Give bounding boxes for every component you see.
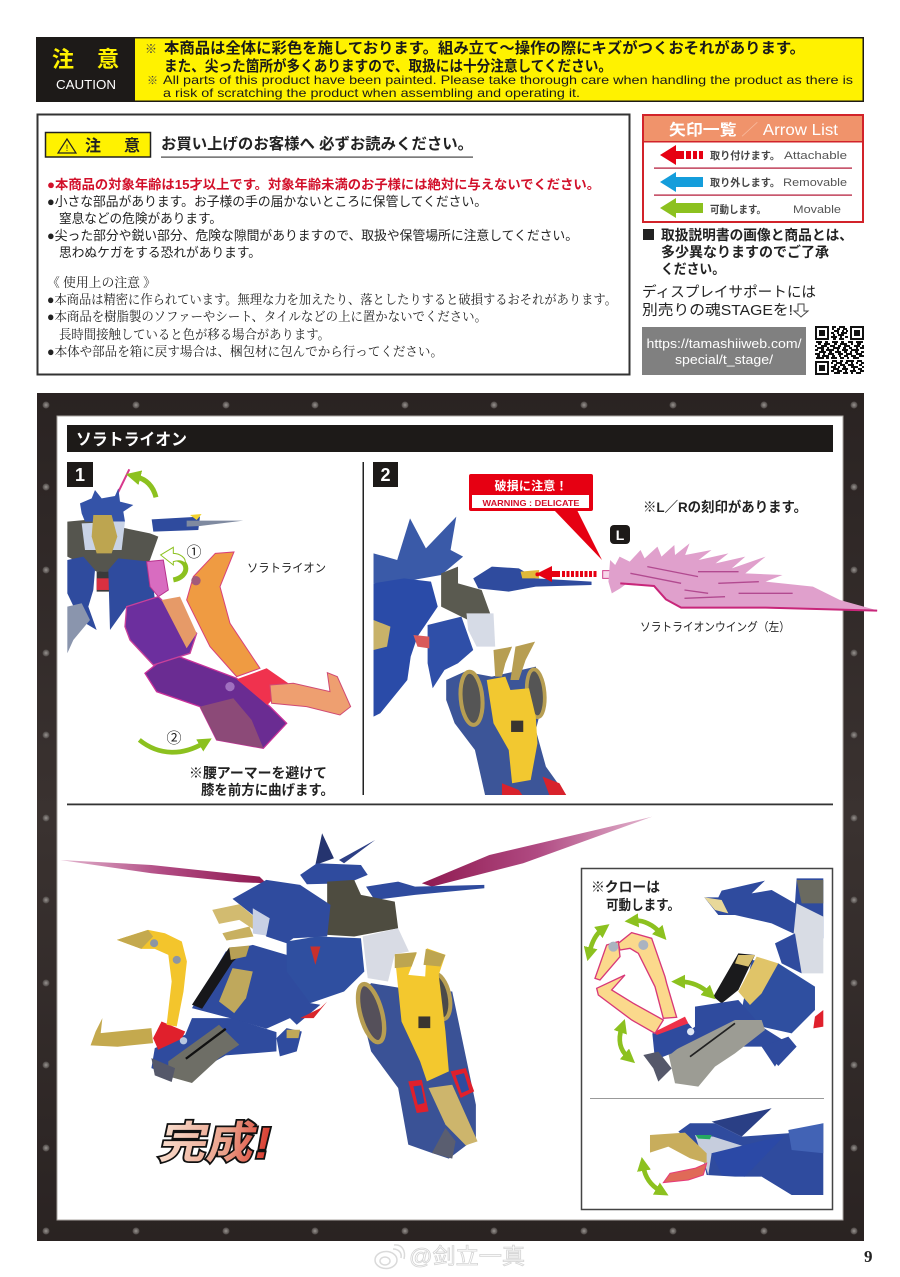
notice items: ●尖った部分や鋭い部分、危険な隙間がありますので、取扱や保管場所に注意してください。 [47,228,578,243]
step 1 badge [67,462,93,487]
notice items: 《 使用上の注意 》 [47,275,156,290]
step 2 badge [373,462,398,487]
arrow list title: 矢印一覧 ／ Arrow List [669,120,839,139]
section heading [67,425,833,452]
warning tag: ! [66,143,68,153]
url box: special/t_stage/ [675,353,774,367]
display support text [642,283,816,319]
inset note: 可動します。 [606,897,680,913]
movable row: 可動します。 [710,203,766,216]
section heading: ソラトライオン [76,430,187,449]
removable row: Removable [783,177,847,189]
step 1 robot [67,469,351,752]
notice items: ●本商品の対象年齢は15才以上です。対象年齢未満のお子様には絶対に与えないでください。 [47,177,600,192]
url box: https://tamashiiweb.com/ [646,337,802,351]
warning callout: 破損に注意！ [494,478,568,493]
wing label: ソラトライオンウイング（左） [640,619,790,634]
product image note: ください。 [661,261,725,277]
notice items: 思わぬケガをする恐れがあります。 [59,245,261,260]
inset arrows [590,921,708,1191]
step 1 note [189,765,334,798]
url box [642,327,806,375]
step 2 badge: 2 [380,465,391,485]
step 1 callout numbers: ① [186,544,202,561]
panel: claw inset [582,868,832,1210]
L badge [610,525,630,544]
caution text: ※ [145,42,157,56]
caution label: 注 [52,47,74,72]
product image note: 取扱説明書の画像と商品とは、 [661,227,853,243]
product image note [643,227,853,277]
movable row: Movable [793,204,841,216]
warning callout [469,474,602,560]
completed lettering: 完成! [156,1119,276,1168]
inset lower head [650,1108,823,1195]
caution text: All parts of this product have been painted. Please take thorough care when handling the product as there is [163,73,853,87]
riveted frame [37,393,864,1241]
caution text [145,39,853,100]
display support text: ディスプレイサポートには [642,283,816,301]
caution text: a risk of scratching the product when assembling and operating it. [163,86,580,100]
display support text: 別売りの魂STAGEを! [642,302,793,319]
inset upper robot [595,878,823,1087]
caution label: CAUTION [56,77,116,92]
caution label: 意 [97,47,119,72]
caution text: 本商品は全体に彩色を施しております。組み立て～操作の際にキズがつくおそれがあります。 [164,39,805,57]
step 1 note: ※腰アーマーを避けて [189,765,327,781]
step 1 callout numbers [166,544,202,747]
notice items [47,177,617,359]
warning callout: WARNING : DELICATE [482,498,580,508]
caution text: ※ [147,75,158,87]
attachable row: 取り付けます。 [710,149,780,162]
L badge: L [616,527,625,543]
notice heading: お買い上げのお客様へ 必ずお読みください。 [161,134,473,153]
warning tag: 注 [85,137,101,155]
attachable row: Attachable [784,150,847,162]
watermark: @剑立一真 [409,1244,525,1269]
step 1 note: 膝を前方に曲げます。 [201,782,334,798]
attachable row [660,145,847,165]
inset note [591,879,680,913]
completed robot [60,817,652,1159]
warning tag: 意 [124,137,140,155]
caution text: また、尖った箇所が多くありますので、取扱には十分注意してください。 [164,57,612,75]
step 1 badge: 1 [75,465,85,485]
notice items: ●本商品を樹脂製のソファーやシート、タイルなどの上に置かないでください。 [47,309,487,324]
attach arrow [536,566,597,582]
notice items: ●小さな部品があります。お子様の手の届かないところに保管してください。 [47,194,487,209]
notice items: 窒息などの危険があります。 [59,211,222,226]
panel: arrow list [643,115,863,222]
notice items: ●本体や部品を箱に戻す場合は、梱包材に包んでから行ってください。 [47,344,443,359]
notice items: 長時間接触していると色が移る場合があります。 [59,327,330,342]
caution banner [36,37,864,102]
caution label [52,47,119,92]
product image note: 多少異なりますのでご了承 [661,244,829,260]
removable row: 取り外します。 [710,176,780,189]
warning tag [46,132,150,157]
removable row [660,172,847,192]
panel: safety notice [38,114,630,374]
L mark note: ※L／Rの刻印があります。 [643,499,807,515]
step 2 robot [374,517,878,795]
page number: 9 [864,1247,872,1266]
movable row [660,198,841,218]
step 1 callout numbers: ② [166,730,182,747]
label: soratolion: ソラトライオン [247,561,326,575]
inset note: ※クローは [591,879,660,895]
notice items: ●本商品は精密に作られています。無理な力を加えたり、落としたりすると破損するおそれがあります。 [47,292,617,307]
QR code [815,326,864,375]
